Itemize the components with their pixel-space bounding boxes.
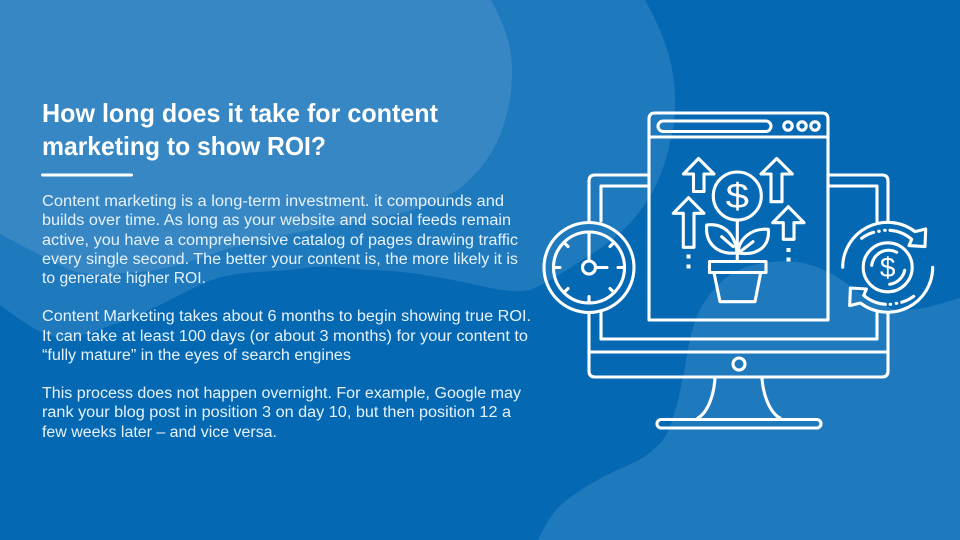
mid blue blob: bottom right <box>538 261 960 540</box>
icon: up arrow top right <box>761 158 792 202</box>
icon: desktop monitor <box>589 175 888 428</box>
illustration: monitor with growth icons <box>544 113 933 428</box>
text block: paragraph 1: every single second. The better your content is, the more likely it is <box>42 251 518 268</box>
text block: paragraph 2: It can take at least 100 days (or about 3 months) for your content to <box>42 328 528 345</box>
icon: dollar cycle <box>843 222 933 312</box>
title <box>42 98 438 161</box>
icon: browser window <box>649 113 828 320</box>
text block: paragraph 2 <box>42 308 531 364</box>
icon: money plant in pot: $ <box>726 177 749 216</box>
icon: clock <box>544 222 634 312</box>
icon: money plant in pot <box>707 172 768 302</box>
text block: paragraph 3: rank your blog post in position 3 on day 10, but then position 12 a <box>42 404 511 421</box>
text block: paragraph 1: to generate higher ROI. <box>42 270 206 287</box>
title underline <box>41 174 133 176</box>
light blue blob: top left <box>0 0 512 274</box>
text block: paragraph 2: “fully mature” in the eyes of search engines <box>42 347 351 364</box>
text block: paragraph 3: few weeks later – and vice versa. <box>42 424 277 441</box>
title: How long does it take for content <box>42 98 438 128</box>
icon: up arrow top left <box>684 158 714 192</box>
text block: paragraph 1 <box>42 193 518 287</box>
coin: $ <box>880 252 896 283</box>
title: marketing to show ROI? <box>42 131 326 161</box>
text block: paragraph 2: Content Marketing takes about 6 months to begin showing true ROI. <box>42 308 531 325</box>
text block: paragraph 1: active, you have a comprehensive catalog of pages drawing traffic <box>42 232 518 249</box>
text block: paragraph 1: builds over time. As long as your website and social feeds remain <box>42 212 511 229</box>
text block: paragraph 3 <box>42 385 521 441</box>
icon: up arrow right <box>773 207 804 262</box>
cycle arrow: bottom <box>850 267 933 312</box>
mid blue blob: top left <box>0 0 675 338</box>
cycle arrow: top <box>843 222 926 267</box>
icon: up arrow left <box>673 198 704 268</box>
text block: paragraph 1: Content marketing is a long-term investment. it compounds and <box>42 193 504 210</box>
text block: paragraph 3: This process does not happen overnight. For example, Google may <box>42 385 521 402</box>
